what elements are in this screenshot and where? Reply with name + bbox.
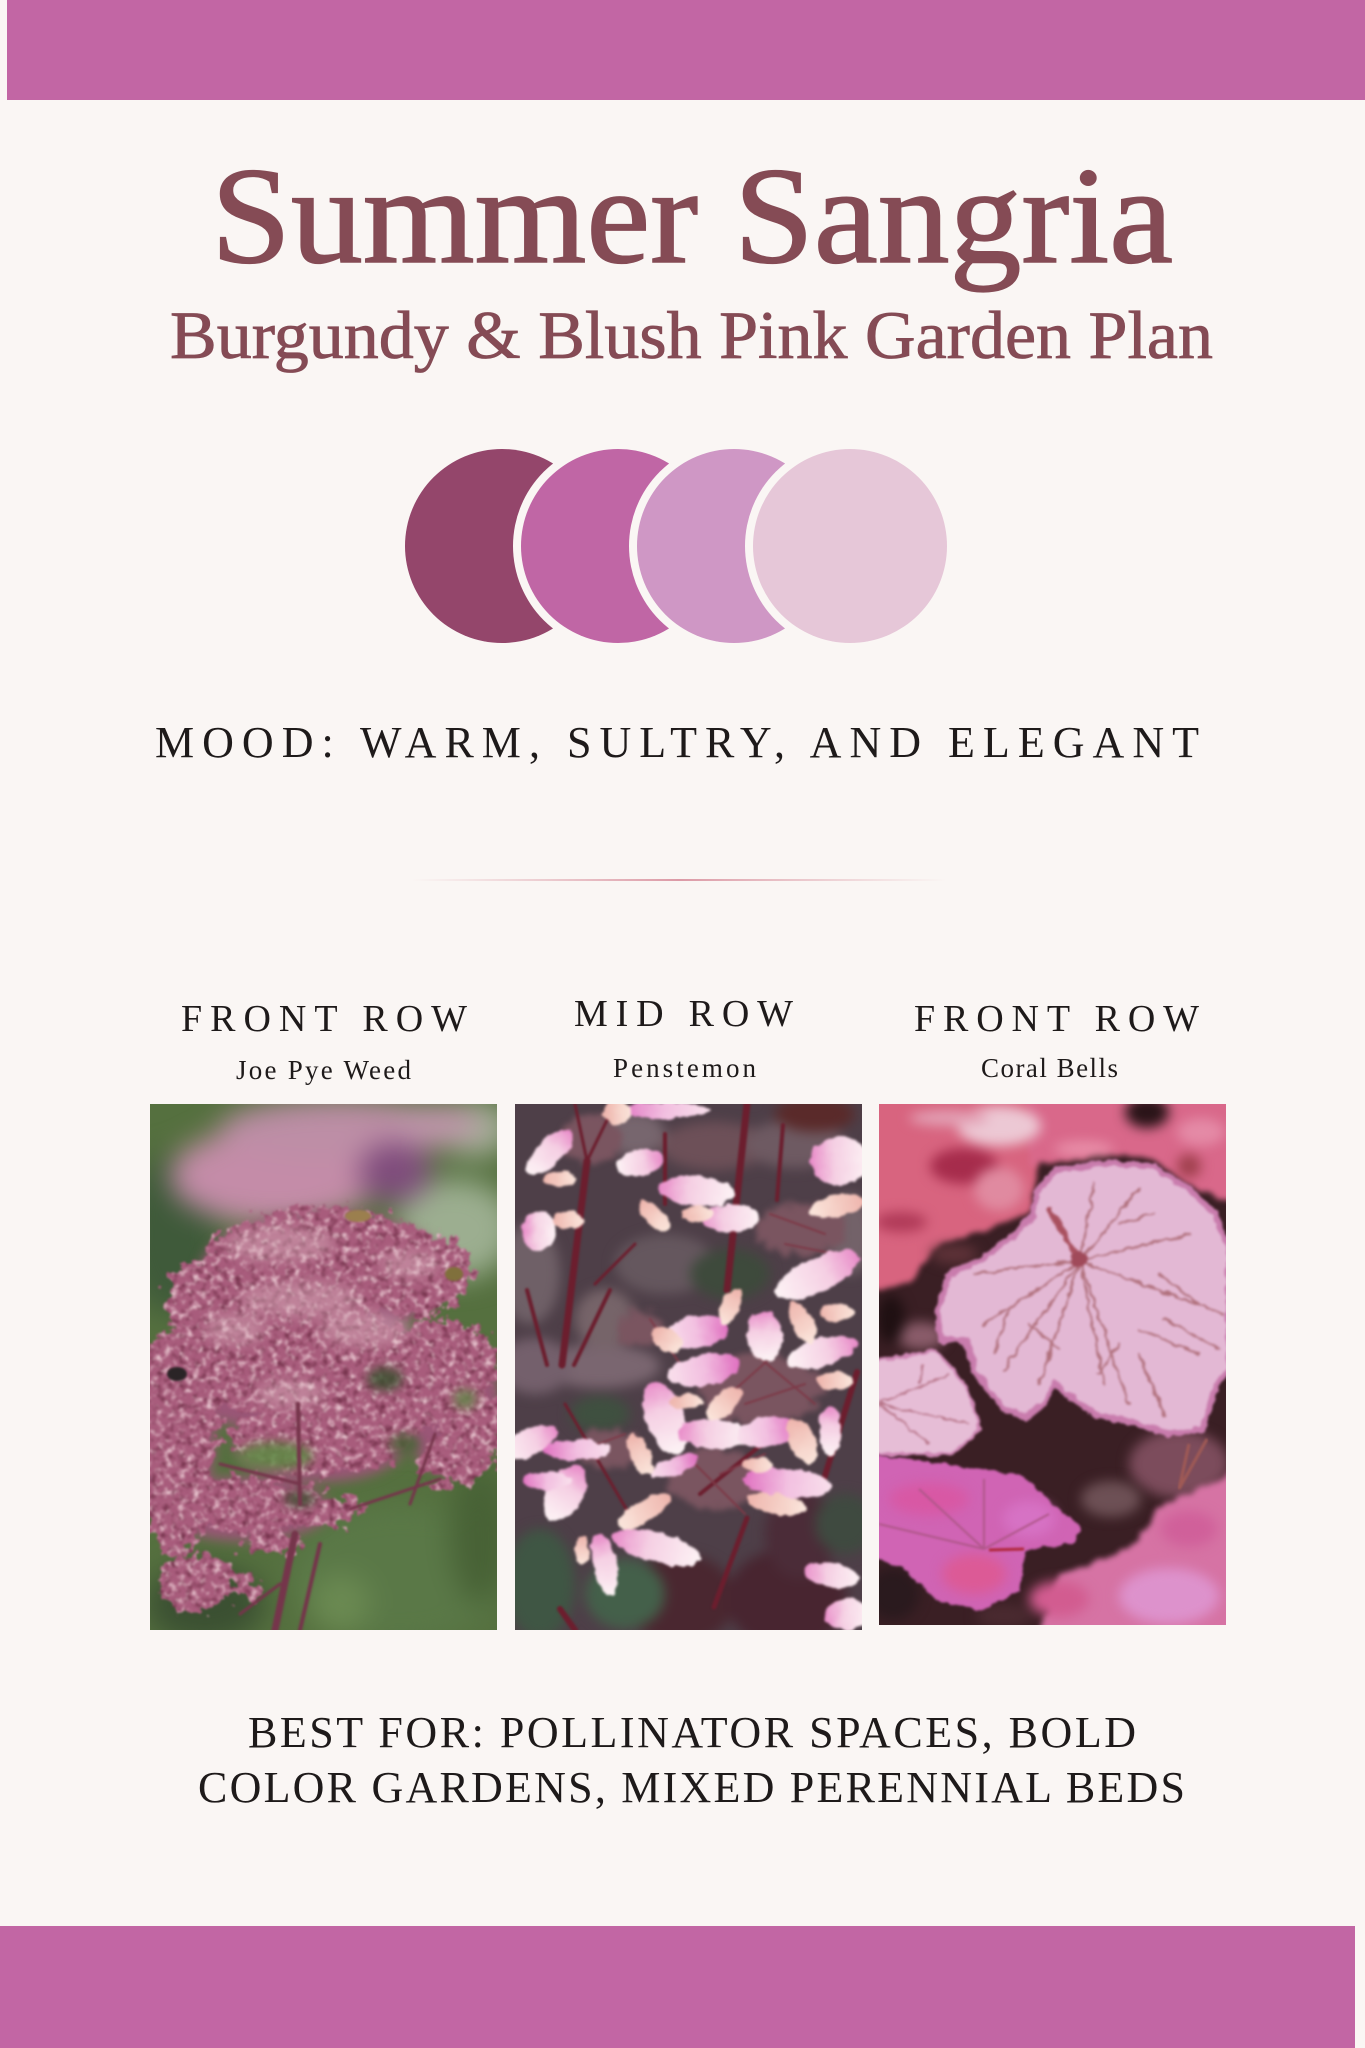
magenta leaf [873,1454,1080,1611]
bees [167,1210,463,1381]
column label: front row left: FRONT ROW [181,998,467,1040]
bloom clusters [131,1209,504,1610]
bottom band [0,1926,1355,2048]
title: Summer Sangria [211,139,1173,292]
plant name: Joe Pye Weed: Joe Pye Weed [236,1055,412,1085]
soft bloom underlay [135,1212,500,1541]
photo: Joe Pye Weed [150,1104,497,1630]
photo: Penstemon [515,1104,862,1630]
mood line: MOOD: WARM, SULTRY, AND ELEGANT [155,718,1199,767]
upper background leaves [869,1094,1236,1292]
photo: Coral Bells [867,1094,1236,1635]
top band [7,0,1365,100]
foliage [515,1104,862,1630]
magenta leaf veins [879,1479,1049,1550]
colour palette circles [405,441,955,651]
best-for line 1: BEST FOR: POLLINATOR SPACES, BOLD [248,1708,1136,1757]
bloom highlights [205,1226,440,1408]
main veined leaf [938,1163,1229,1434]
best-for line 2: COLOR GARDENS, MIXED PERENNIAL BEDS [198,1763,1185,1812]
seed sprays [558,1115,845,1509]
stems [220,1404,440,1630]
column label: mid row: MID ROW [574,993,793,1035]
leaf tints [875,1096,1229,1498]
plant name: Penstemon: Penstemon [613,1053,756,1083]
green gaps between blooms [237,1367,477,1507]
column label: front row right: FRONT ROW [914,998,1199,1040]
left pale leaf [873,1350,980,1454]
plant name: Coral Bells: Coral Bells [981,1053,1118,1083]
red stems [527,1104,857,1630]
lower background leaves [1039,1472,1236,1635]
bell flowers [497,1101,870,1631]
leaf veins [974,1184,1224,1414]
subtitle: Burgundy & Blush Pink Garden Plan [170,297,1213,373]
